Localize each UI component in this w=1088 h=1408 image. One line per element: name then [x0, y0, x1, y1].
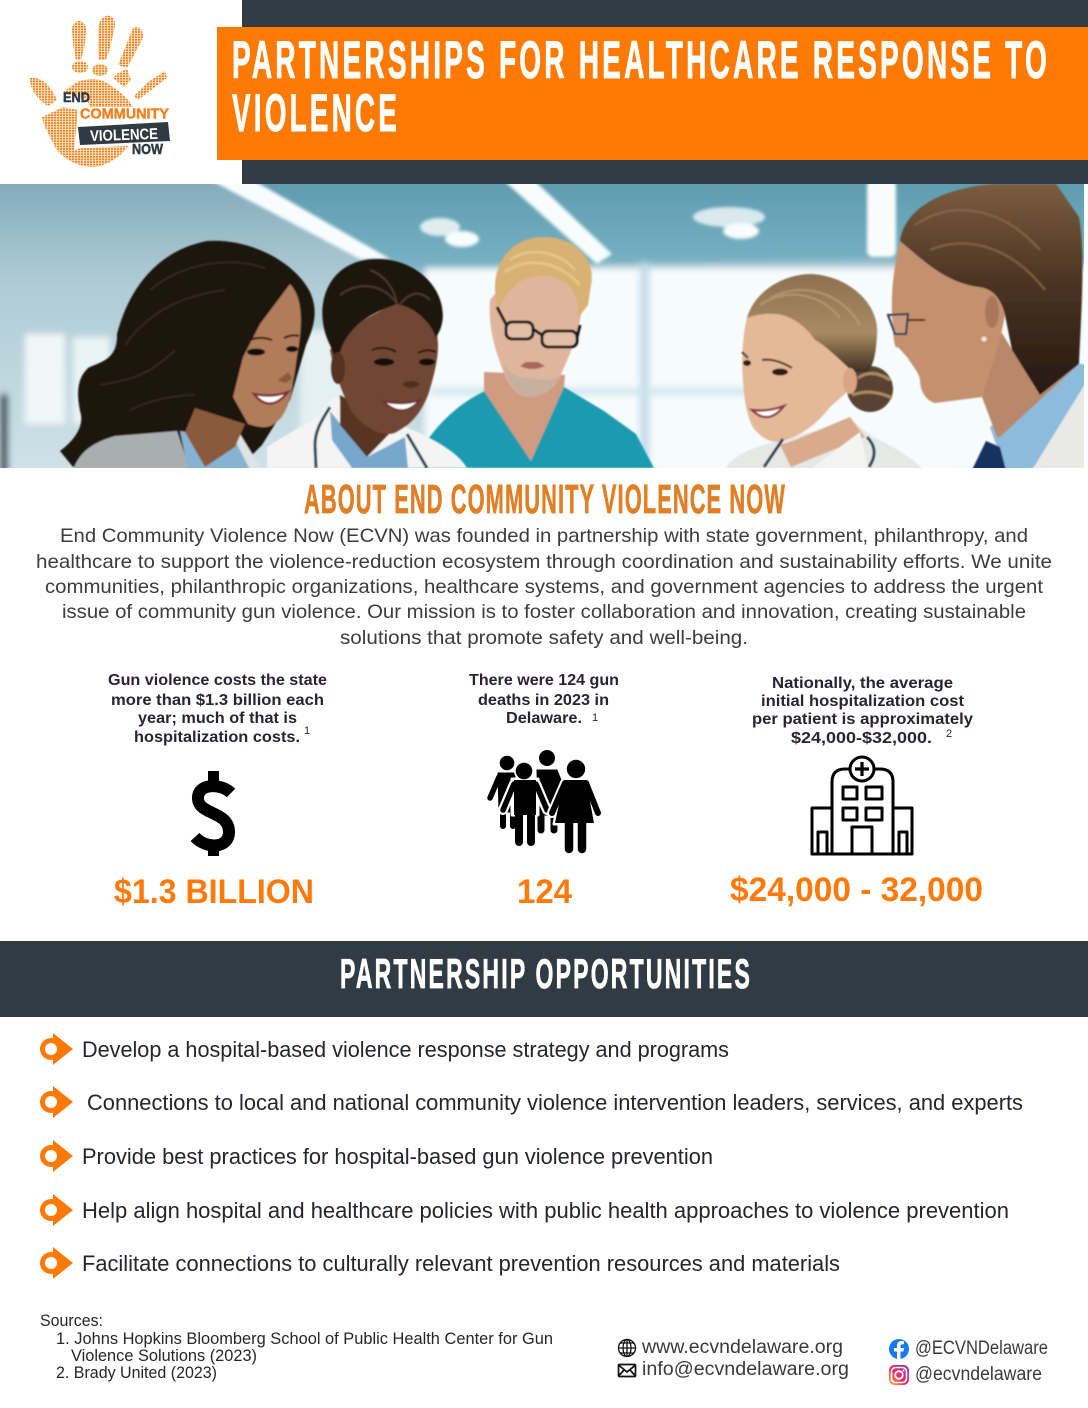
person: woman in profile [888, 184, 1088, 470]
sources: Violence Solutions (2023) [71, 1347, 257, 1365]
stat text: 1 [304, 725, 310, 737]
stat value: $1.3 BILLION [114, 873, 314, 911]
stat text [108, 672, 327, 746]
back centre person [537, 750, 563, 830]
stat: cost to the state [108, 672, 327, 911]
stat text [469, 672, 619, 727]
section: about [36, 476, 1052, 649]
back left person [490, 756, 515, 826]
title: VIOLENCE [232, 84, 400, 143]
stat text: hospitalization costs. [134, 729, 300, 746]
logo words: COMMUNITY [80, 106, 169, 122]
stat text: There were 124 gun [469, 672, 619, 689]
about paragraph: communities, philanthropic organizations, healthcare systems, and government agencies to address the urgent [45, 576, 1044, 598]
stat text [752, 675, 973, 747]
icon: orange handprint [30, 16, 167, 167]
about paragraph: End Community Violence Now (ECVN) was founded in partnership with state government, philanthropy, and [60, 525, 1028, 547]
stat text: 1 [592, 712, 598, 724]
logo words: END [63, 89, 90, 105]
bullet 3: Provide best practices for hospital-based gun violence prevention [82, 1144, 713, 1169]
header [217, 0, 1088, 184]
bullet 2: Connections to local and national community violence intervention leaders, services, and experts [87, 1090, 1023, 1115]
band background [0, 941, 1088, 1017]
contact details [618, 1337, 1048, 1385]
icon: globe [618, 1340, 636, 1356]
logo band [78, 122, 170, 145]
sources: Sources: [40, 1312, 103, 1330]
stat: hospitalization cost [730, 675, 983, 909]
title [232, 31, 1050, 143]
stat text: more than $1.3 billion each [111, 692, 324, 709]
logo: End Community Violence Now hand [30, 16, 170, 167]
icon: instagram [889, 1365, 909, 1385]
front right person [552, 758, 598, 849]
about paragraph [36, 525, 1052, 649]
about paragraph: healthcare to support the violence-reduction ecosystem through coordination and sustainability efforts. We unite [36, 551, 1052, 573]
person: woman with stethoscope [267, 259, 467, 468]
icon: group of people [490, 750, 598, 849]
icon: hospital [812, 757, 912, 854]
stat text: initial hospitalization cost [761, 693, 965, 710]
sources [40, 1312, 553, 1382]
stat text: Nationally, the average [772, 675, 953, 692]
stat value: 124 [517, 873, 572, 911]
photo: healthcare workers [0, 175, 1088, 478]
stat text: 2 [946, 728, 952, 740]
bullet 1: Develop a hospital-based violence response strategy and programs [82, 1037, 729, 1062]
band: partnership opportunities [0, 941, 1088, 1017]
stat text: $24,000-$32,000. [791, 730, 932, 747]
stat value: $24,000 - 32,000 [730, 871, 983, 909]
about paragraph: issue of community gun violence. Our mission is to foster collaboration and innovation, creating sustainable [62, 601, 1026, 623]
logo words [63, 89, 169, 158]
photo background [0, 175, 1088, 478]
about paragraph: solutions that promote safety and well-being. [340, 627, 748, 649]
header dark bar [242, 0, 1088, 184]
facebook handle: @ECVNDelaware [915, 1338, 1048, 1359]
stat: gun deaths [469, 672, 619, 911]
email: info@ecvndelaware.org [642, 1359, 849, 1380]
website: www.ecvndelaware.org [641, 1337, 843, 1358]
band heading: PARTNERSHIP OPPORTUNITIES [340, 950, 752, 997]
logo words: NOW [132, 142, 163, 158]
icon: facebook [889, 1339, 909, 1359]
bullet 5: Facilitate connections to culturally relevant prevention resources and materials [82, 1251, 840, 1276]
stat text: deaths in 2023 in [478, 692, 609, 709]
sources: 1. Johns Hopkins Bloomberg School of Public Health Center for Gun [56, 1330, 553, 1348]
title banner [217, 27, 1088, 160]
logo words: VIOLENCE [90, 126, 158, 145]
person: woman with long black hair [60, 241, 315, 470]
bullet 4: Help align hospital and healthcare policies with public health approaches to violence prevention [82, 1198, 1009, 1223]
person: woman with bun [725, 274, 924, 470]
icon: envelope [618, 1364, 636, 1376]
stat text: Gun violence costs the state [108, 672, 327, 689]
stat text: year; much of that is [138, 710, 297, 727]
stat text: per patient is approximately [752, 711, 973, 728]
person: man in teal scrubs [410, 237, 654, 468]
sources: 2. Brady United (2023) [56, 1364, 217, 1382]
stat text: Delaware. [506, 710, 582, 727]
front left person [503, 761, 547, 842]
instagram handle: @ecvndelaware [915, 1364, 1042, 1385]
icon: dollar sign [195, 771, 231, 856]
list: partnership opportunities [40, 1033, 1023, 1279]
